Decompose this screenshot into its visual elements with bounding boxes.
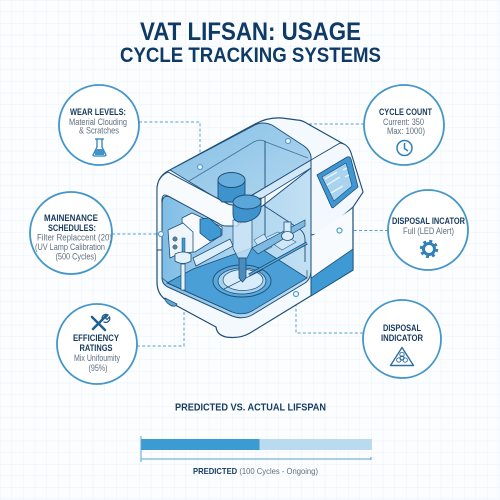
back wall edges <box>263 141 305 262</box>
title: VAT LIFSAN: USAGE <box>140 18 361 46</box>
panel: efficiency ratings: EFFICIENCY <box>73 332 120 343</box>
floor <box>167 246 307 314</box>
machine body <box>157 118 363 338</box>
pale strip right of arch <box>236 160 311 213</box>
title <box>120 18 381 67</box>
glass top <box>170 123 311 206</box>
icon: gear <box>421 241 437 257</box>
side panel <box>311 143 363 235</box>
panel: maintenance schedules: Filter Replaccent (20) <box>37 232 112 242</box>
nozzle column <box>233 220 252 258</box>
panel: cycle count <box>364 85 444 165</box>
title: CYCLE TRACKING SYSTEMS <box>120 43 381 67</box>
panel: maintenance schedules: (500 Cycles) <box>56 252 97 262</box>
panel: disposal indicator: INDICATOR <box>381 332 423 343</box>
rail back <box>252 220 305 254</box>
panel: disposal incator: DISPOSAL INCATOR <box>392 215 465 226</box>
right post <box>284 222 291 234</box>
machine illustration <box>157 118 363 338</box>
panel: maintenance schedules: MAINENANCE <box>44 212 98 223</box>
lifespan label: PREDICTED (100 Cycles - Ongoing) <box>193 466 318 476</box>
panel: cycle count: Current: 350 <box>383 117 424 127</box>
chart: lifespan bar <box>141 436 372 462</box>
connector lines <box>112 122 388 346</box>
cylinder 1 <box>218 180 245 202</box>
panel: wear levels: WEAR LEVELS: <box>70 106 126 117</box>
floor edge strip <box>162 270 307 312</box>
control screen <box>317 157 358 208</box>
panel: wear levels: & Scratches <box>79 126 119 136</box>
panel: efficiency ratings: (95%) <box>88 363 108 373</box>
panel: disposal indicator <box>363 300 441 378</box>
left guide rod <box>175 252 191 264</box>
panel: maintenance schedules: (UV Lamp Calibration <box>35 242 105 252</box>
panel: efficiency ratings: Mix Unifoumity <box>74 353 120 363</box>
foot <box>165 298 177 306</box>
left carriage block <box>182 213 222 252</box>
panel: wear levels: Material Clouding <box>69 117 127 127</box>
interior back blocks <box>254 232 296 252</box>
icon: flask <box>93 139 106 156</box>
icon: biohazard triangle <box>390 348 414 366</box>
cylinder 2 <box>233 198 261 222</box>
panel: disposal incator: Full (LED Alert) <box>403 226 454 236</box>
panel: maintenance schedules: SCHEDULES: <box>48 222 96 233</box>
anchor dots <box>158 138 342 296</box>
opening <box>162 168 311 318</box>
panel: cycle count: Max: 1000) <box>387 126 425 136</box>
icon: clock <box>397 140 412 156</box>
panel: disposal incator <box>388 190 468 270</box>
blue side band <box>311 249 353 296</box>
panel: efficiency ratings: RATINGS <box>80 342 112 353</box>
panel: disposal indicator: DISPOSAL <box>383 322 421 333</box>
panel: cycle count: CYCLE COUNT <box>379 106 432 117</box>
vat rings <box>213 265 271 297</box>
icon: wrench and screwdriver <box>92 314 110 330</box>
rail left wall <box>193 239 233 266</box>
panel: efficiency ratings <box>57 304 137 384</box>
heading: lifespan: PREDICTED VS. ACTUAL LIFSPAN <box>175 402 326 414</box>
panel: wear levels <box>59 85 139 165</box>
panel: maintenance schedules <box>30 192 112 274</box>
stir rod <box>249 243 307 275</box>
white arch band <box>157 172 238 250</box>
inner glass roof edge <box>189 140 308 181</box>
